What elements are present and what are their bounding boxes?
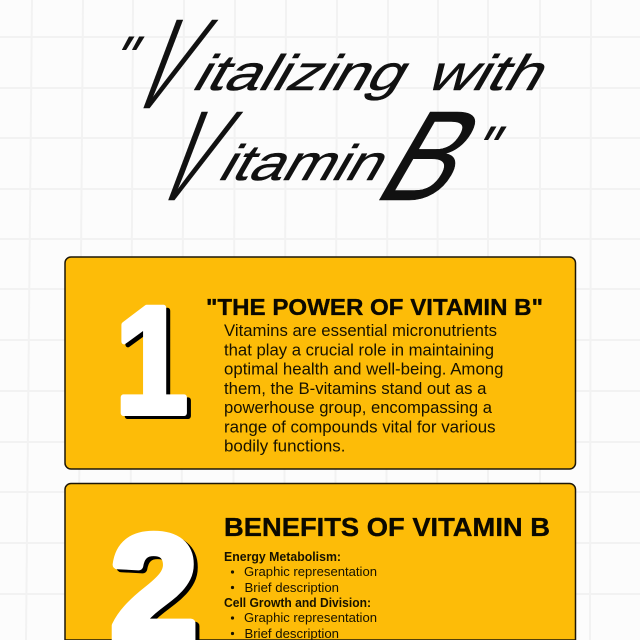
list: cell growth and division	[224, 595, 377, 640]
body text: bodily functions.	[224, 438, 346, 456]
body text: range of compounds vital for various	[224, 418, 496, 436]
title: V	[134, 85, 259, 228]
body text: that play a crucial role in maintaining	[224, 342, 494, 360]
title: italizing	[184, 46, 424, 101]
list: cell growth and division: Graphic representation	[244, 610, 377, 625]
heading: "THE POWER OF VITAMIN B"	[206, 294, 543, 320]
panel background	[65, 484, 576, 640]
heading: BENEFITS OF VITAMIN B	[224, 512, 550, 542]
list: cell growth and division: Cell Growth and Division:	[224, 595, 371, 610]
body text: Vitamins are essential micronutrients	[224, 322, 497, 340]
number 1: 1	[119, 278, 192, 449]
list: energy metabolism	[224, 549, 377, 595]
list: energy metabolism: Brief description	[244, 580, 339, 595]
title	[70, 0, 592, 228]
title: B	[354, 85, 509, 228]
title: itamin	[210, 136, 402, 191]
body text: them, the B-vitamins stand out as a	[224, 380, 486, 398]
title: "	[457, 113, 516, 181]
list: energy metabolism: Graphic representation	[244, 564, 377, 579]
title: with	[416, 46, 562, 101]
title: "	[95, 23, 154, 91]
body text: optimal health and well-being. Among	[224, 360, 504, 378]
panel: the power of vitamin B	[65, 257, 576, 469]
panel: benefits of vitamin B	[65, 484, 576, 640]
number 1: 1	[115, 275, 188, 446]
body text: powerhouse group, encompassing a	[224, 399, 492, 417]
list: energy metabolism: Energy Metabolism:	[224, 549, 341, 564]
body text	[224, 322, 504, 456]
panel background	[65, 257, 576, 469]
